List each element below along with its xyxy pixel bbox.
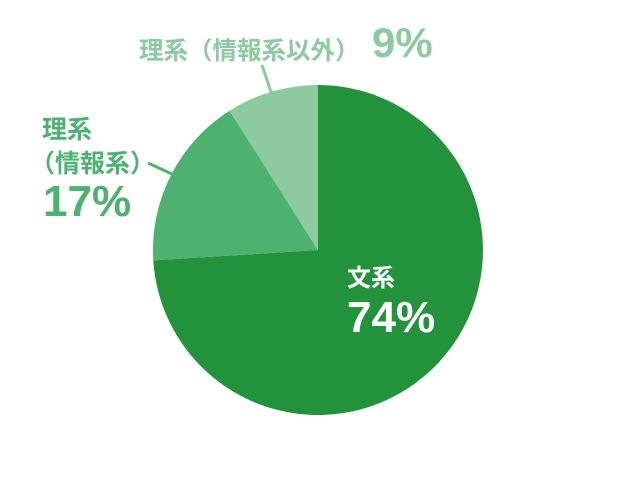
label: 理系（情報系以外） 9% [139,19,433,66]
slice: 理系（情報系以外） 9% [230,85,318,250]
leader line: 17% [148,163,172,174]
label: 文系 74%: 74% [347,293,435,342]
label: 理系（情報系） 17%: 理系 [42,116,92,144]
leader line: 9% [262,65,271,92]
slice: 理系（情報系） 17% [153,111,318,260]
label: 理系（情報系） 17%: 17% [43,177,131,226]
label: 文系 74%: 文系 [347,265,395,292]
pie chart [153,85,483,415]
label: 理系（情報系） 17% [30,116,155,226]
label: 文系 74% [347,265,435,342]
label: 理系（情報系以外） 9%: 9% [372,19,433,66]
slice: 文系 74% [153,85,483,415]
label: 理系（情報系） 17%: （情報系） [30,150,155,178]
label: 理系（情報系以外） 9%: 理系（情報系以外） [139,37,360,65]
